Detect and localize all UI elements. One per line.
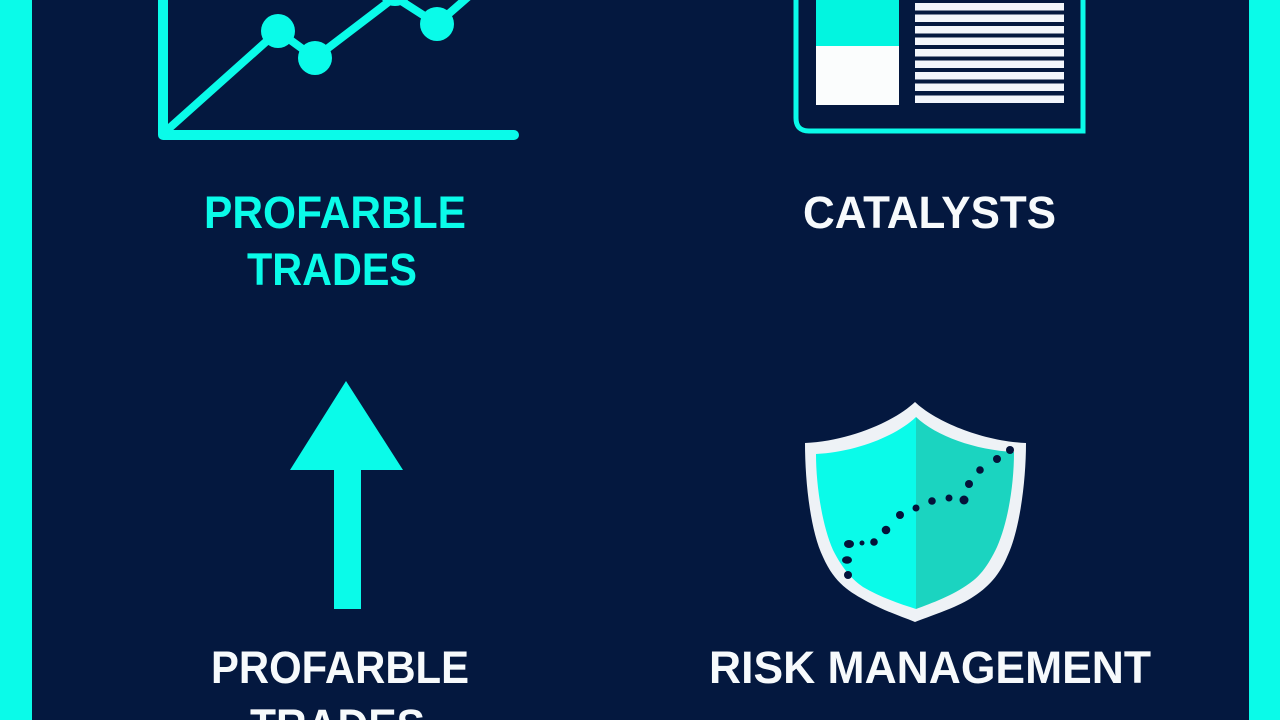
heading: profarble trades, cyan: PROFARBLE <box>204 187 466 238</box>
heading: profarble trades, cyan: TRADES <box>247 244 417 295</box>
icon: up arrow <box>290 381 403 609</box>
icon: line chart <box>163 0 514 135</box>
heading: risk management: RISK MANAGEMENT <box>709 642 1151 693</box>
heading: catalysts: CATALYSTS <box>803 187 1056 238</box>
heading: profarble trades, white <box>211 642 469 720</box>
left border bar <box>0 0 32 720</box>
heading: profarble trades, white: PROFARBLE <box>211 642 469 693</box>
heading: profarble trades, cyan <box>204 187 466 295</box>
icon: shield with dotted path <box>805 402 1026 622</box>
icon: document with text lines <box>796 0 1083 131</box>
right border bar <box>1249 0 1280 720</box>
